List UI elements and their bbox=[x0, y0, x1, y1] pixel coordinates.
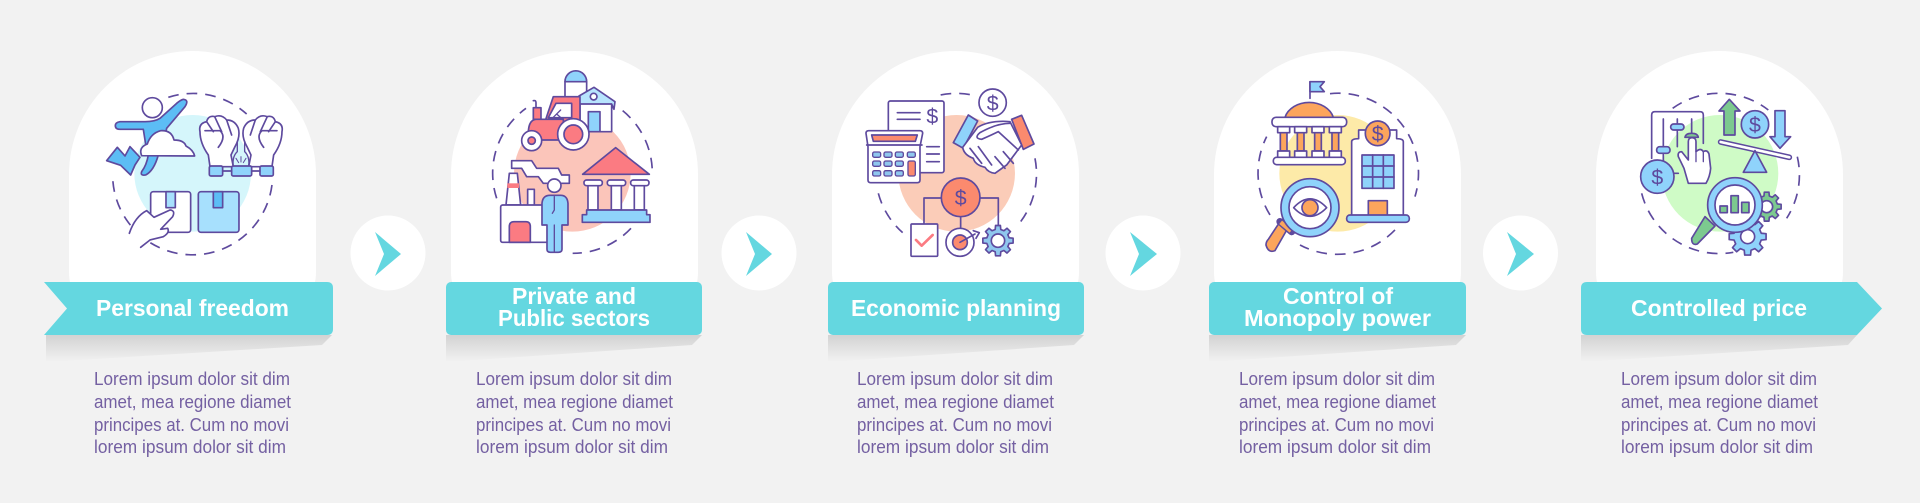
heading: control of monopoly power: Control of bbox=[1283, 283, 1393, 309]
icon: economic planning: $ bbox=[955, 186, 967, 210]
banner: controlled price bbox=[1581, 282, 1882, 335]
icon: economic planning: $ bbox=[926, 104, 938, 128]
arrow 3 bbox=[1106, 216, 1180, 290]
banner: private and public sectors bbox=[446, 282, 702, 335]
heading: private and public sectors: Private and bbox=[512, 283, 636, 309]
icon: controlled price bbox=[1641, 93, 1799, 255]
heading: controlled price: Controlled price bbox=[1631, 295, 1807, 321]
text block: private and public sectors: lorem ipsum dolor sit dim bbox=[476, 436, 668, 457]
icon: controlled price: $ bbox=[1651, 166, 1663, 190]
text block: personal freedom: principes at. Cum no movi bbox=[94, 414, 289, 435]
text block: controlled price: Lorem ipsum dolor sit dim bbox=[1621, 368, 1817, 389]
banner: personal freedom bbox=[44, 282, 333, 335]
panel: personal freedom bbox=[44, 51, 333, 457]
text block: control of monopoly power: principes at. Cum no movi bbox=[1239, 414, 1434, 435]
panel: control of monopoly power bbox=[1209, 51, 1466, 457]
heading: private and public sectors bbox=[498, 283, 650, 331]
heading: personal freedom: Personal freedom bbox=[96, 295, 289, 321]
arch card bbox=[1596, 51, 1843, 300]
arrow 4 bbox=[1483, 216, 1558, 290]
text block: economic planning: principes at. Cum no movi bbox=[857, 414, 1052, 435]
text block: control of monopoly power: Lorem ipsum dolor sit dim bbox=[1239, 368, 1435, 389]
icon: personal freedom bbox=[107, 93, 282, 255]
arch card bbox=[451, 51, 698, 300]
banner shadow bbox=[828, 335, 1084, 362]
panel: private and public sectors bbox=[446, 51, 702, 457]
icon: economic planning bbox=[866, 89, 1036, 256]
icon: control of monopoly power bbox=[1258, 82, 1418, 254]
text block: private and public sectors: amet, mea regione diamet bbox=[476, 391, 673, 412]
banner shadow bbox=[46, 335, 332, 362]
text block: personal freedom: lorem ipsum dolor sit dim bbox=[94, 436, 286, 457]
panel: controlled price bbox=[1581, 51, 1882, 457]
text block: personal freedom bbox=[94, 368, 291, 457]
text block: control of monopoly power bbox=[1239, 368, 1436, 457]
text block: economic planning bbox=[857, 368, 1054, 457]
text block: private and public sectors: principes at. Cum no movi bbox=[476, 414, 671, 435]
banner: economic planning bbox=[828, 282, 1084, 335]
heading: control of monopoly power bbox=[1244, 283, 1431, 331]
text block: personal freedom: amet, mea regione diamet bbox=[94, 391, 291, 412]
arrow 1 bbox=[350, 216, 426, 290]
heading: economic planning: Economic planning bbox=[851, 295, 1061, 321]
icon: control of monopoly power: $ bbox=[1372, 122, 1384, 146]
icon: controlled price: $ bbox=[1749, 113, 1761, 137]
banner shadow bbox=[446, 335, 702, 362]
arch card bbox=[69, 51, 316, 300]
text block: economic planning: Lorem ipsum dolor sit dim bbox=[857, 368, 1053, 389]
icon: private and public sectors bbox=[493, 71, 652, 253]
text block: control of monopoly power: lorem ipsum dolor sit dim bbox=[1239, 436, 1431, 457]
banner shadow bbox=[1581, 335, 1857, 362]
text block: controlled price: amet, mea regione diamet bbox=[1621, 391, 1818, 412]
text block: economic planning: amet, mea regione diamet bbox=[857, 391, 1054, 412]
banner: control of monopoly power bbox=[1209, 282, 1466, 335]
arch card bbox=[832, 51, 1079, 300]
text block: private and public sectors bbox=[476, 368, 673, 457]
text block: control of monopoly power: amet, mea regione diamet bbox=[1239, 391, 1436, 412]
arrow 2 bbox=[722, 216, 796, 290]
heading: control of monopoly power: Monopoly power bbox=[1244, 305, 1431, 331]
heading: private and public sectors: Public sectors bbox=[498, 305, 650, 331]
text block: controlled price: lorem ipsum dolor sit dim bbox=[1621, 436, 1813, 457]
panel: economic planning bbox=[828, 51, 1084, 457]
arch card bbox=[1214, 51, 1461, 300]
text block: personal freedom: Lorem ipsum dolor sit dim bbox=[94, 368, 290, 389]
text block: controlled price bbox=[1621, 368, 1818, 457]
icon: economic planning: $ bbox=[987, 91, 999, 115]
banner shadow bbox=[1209, 335, 1466, 362]
text block: private and public sectors: Lorem ipsum dolor sit dim bbox=[476, 368, 672, 389]
text block: economic planning: lorem ipsum dolor sit dim bbox=[857, 436, 1049, 457]
text block: controlled price: principes at. Cum no movi bbox=[1621, 414, 1816, 435]
